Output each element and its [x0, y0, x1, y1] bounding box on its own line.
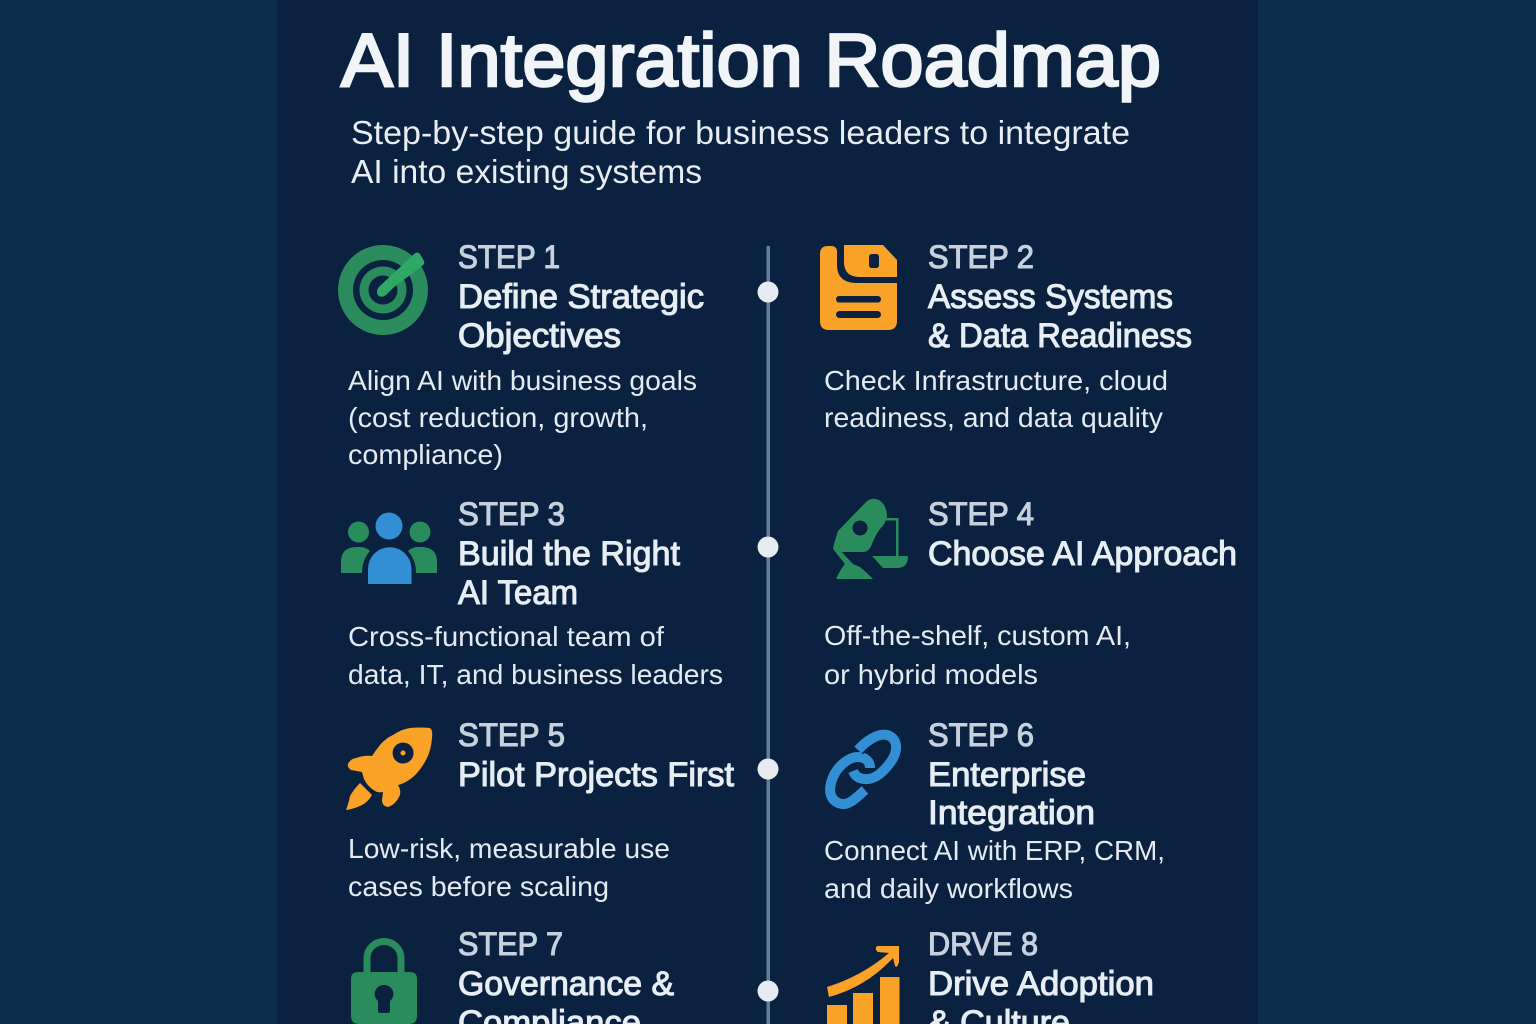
step 2 heading: & Data Readiness	[928, 317, 1192, 355]
step 5 label: STEP 5	[458, 717, 565, 753]
step 6 heading: Enterprise	[928, 756, 1086, 794]
step 7 heading	[458, 965, 674, 1024]
panel: step 4	[824, 496, 1237, 690]
step 1 label: STEP 1	[458, 239, 560, 275]
step 8 label: DRVE 8	[928, 926, 1038, 962]
panel: step 7	[351, 926, 674, 1024]
step 4 description: or hybrid models	[824, 659, 1038, 690]
step 4 label: STEP 4	[928, 496, 1034, 532]
panel: step 5	[346, 717, 735, 902]
central panel	[277, 0, 1258, 1024]
step 8 heading	[928, 965, 1154, 1024]
step 1 description: compliance)	[348, 439, 503, 470]
icon: chain link	[830, 735, 896, 804]
step 6 description	[824, 835, 1165, 904]
step 1 heading: Define Strategic	[458, 278, 704, 316]
icon: growth chart	[827, 946, 900, 1024]
step 3 heading: Build the Right	[458, 535, 681, 573]
panel: step 2	[820, 239, 1192, 433]
step 4 description	[824, 620, 1131, 690]
step 7 heading: Governance &	[458, 965, 674, 1003]
subtitle: Step-by-step guide for business leaders to integrate	[351, 114, 1130, 151]
step 4 heading: Choose AI Approach	[928, 535, 1237, 573]
step 6 description: Connect AI with ERP, CRM,	[824, 835, 1165, 866]
subtitle	[351, 114, 1130, 190]
icon: tilted shape with scale	[833, 499, 908, 579]
step 3 heading: AI Team	[458, 574, 578, 612]
step 1 heading: Objectives	[458, 317, 621, 355]
step 3 description: data, IT, and business leaders	[348, 659, 723, 690]
step 1 description: (cost reduction, growth,	[348, 402, 648, 433]
step 6 heading	[928, 756, 1095, 832]
step 6 heading: Integration	[928, 794, 1095, 832]
icon: team	[341, 512, 437, 584]
panel: step 6	[824, 717, 1165, 904]
subtitle: AI into existing systems	[351, 153, 702, 190]
step 6 description: and daily workflows	[824, 873, 1073, 904]
icon: padlock	[351, 942, 417, 1024]
step 3 description: Cross-functional team of	[348, 621, 664, 652]
step 3 label: STEP 3	[458, 496, 565, 532]
panel: step 8	[827, 926, 1154, 1024]
step 3 description	[348, 621, 723, 690]
step 2 description: Check Infrastructure, cloud	[824, 365, 1168, 396]
step 2 description: readiness, and data quality	[824, 402, 1163, 433]
step 1 description	[348, 365, 697, 470]
step 1 heading	[458, 278, 704, 355]
step 7 label: STEP 7	[458, 926, 563, 962]
timeline	[758, 246, 778, 1024]
panel: step 3	[341, 496, 723, 690]
title: AI Integration Roadmap	[341, 18, 1161, 102]
step 5 heading: Pilot Projects First	[458, 756, 735, 794]
step 2 heading	[928, 278, 1192, 355]
icon: rocket	[346, 728, 432, 810]
step 2 label: STEP 2	[928, 239, 1034, 275]
panel: step 1	[338, 239, 704, 470]
icon: target	[338, 245, 428, 335]
step 3 heading	[458, 535, 681, 612]
step 6 label: STEP 6	[928, 717, 1034, 753]
icon: floppy disk	[820, 245, 897, 330]
step 5 description: cases before scaling	[348, 871, 609, 902]
step 1 description: Align AI with business goals	[348, 365, 697, 396]
step 5 description: Low-risk, measurable use	[348, 833, 670, 864]
step 8 heading: Drive Adoption	[928, 965, 1154, 1003]
step 2 heading: Assess Systems	[928, 278, 1173, 316]
step 5 description	[348, 833, 670, 902]
step 4 description: Off-the-shelf, custom AI,	[824, 620, 1131, 651]
step 2 description	[824, 365, 1168, 433]
